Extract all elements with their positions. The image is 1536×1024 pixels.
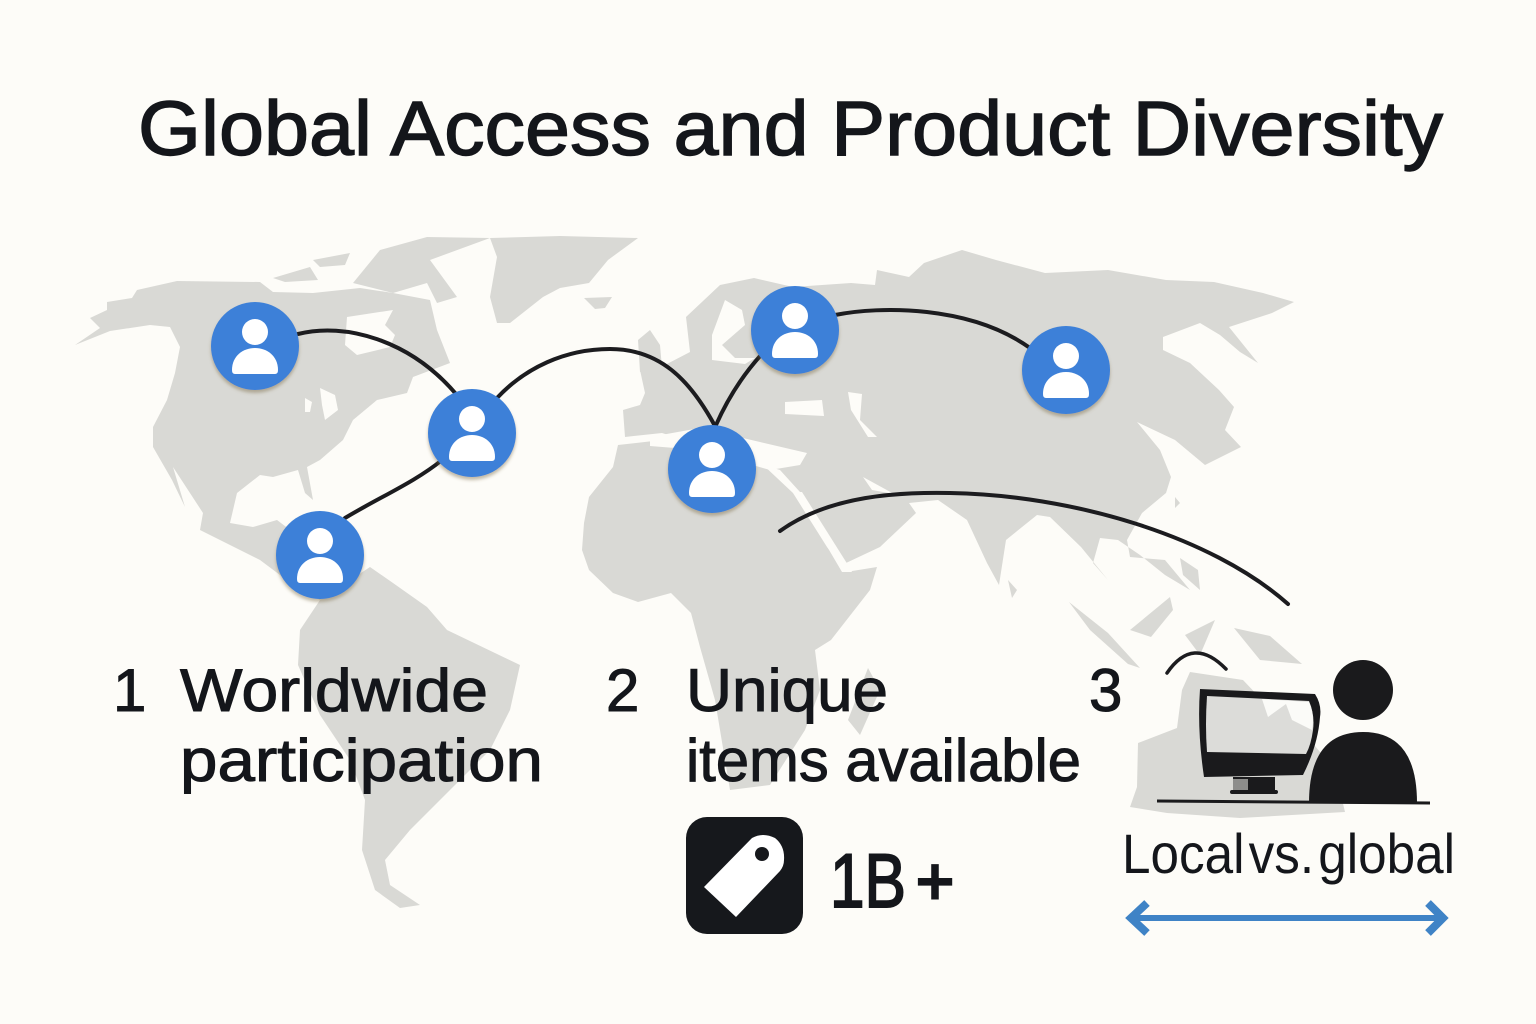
- Baltic: [712, 300, 755, 364]
- Australia: [1130, 672, 1345, 818]
- Madagascar: [848, 668, 880, 735]
- Sri Lanka, Taiwan, Philippines: [1008, 497, 1200, 598]
- stat: 1B+: +: [915, 842, 955, 920]
- user icon 4: [668, 425, 756, 513]
- item 2: unique items available: Unique: [686, 657, 888, 724]
- Europe and Asia: [623, 250, 1294, 590]
- item 3: number: 3: [1089, 657, 1122, 724]
- stat: 1B+: 1B: [830, 839, 906, 924]
- item 1: worldwide participation: Worldwide: [180, 657, 488, 724]
- UK and Ireland: [638, 330, 662, 372]
- Greenland: [490, 236, 638, 323]
- Africa: [582, 440, 877, 790]
- user icon 3: [276, 511, 364, 599]
- item 1: worldwide participation: 1: [113, 657, 146, 724]
- item 2: unique items available: items available: [686, 727, 1081, 794]
- connection lines: [298, 310, 1288, 604]
- icon: price tag: [686, 817, 803, 934]
- Great Lakes: [305, 388, 338, 420]
- user icon 6: [1022, 326, 1110, 414]
- Red Sea: [795, 492, 852, 572]
- label: local vs. global: Local vs. global: [1122, 822, 1455, 885]
- item 1: worldwide participation: participation: [180, 727, 543, 794]
- Arctic islands: [273, 237, 490, 303]
- seas: [305, 300, 894, 572]
- North America: [75, 281, 450, 600]
- Caspian Sea: [848, 392, 877, 437]
- item 1: worldwide participation: [113, 657, 543, 794]
- Persian Gulf: [863, 477, 894, 494]
- item 2: unique items available: [606, 657, 1081, 794]
- world map: [75, 236, 1345, 908]
- Black Sea: [785, 400, 824, 416]
- Iceland: [584, 297, 612, 309]
- Indonesia: [1069, 602, 1140, 668]
- icon: person at computer: [1157, 653, 1430, 803]
- item 2: unique items available: 2: [606, 657, 639, 724]
- user icon 5: [751, 286, 839, 374]
- user icon 1: [211, 302, 299, 390]
- South America: [298, 567, 520, 908]
- arrow: double headed: [1130, 903, 1445, 933]
- user icon 2: [428, 389, 516, 477]
- title: Global Access and Product Diversity: [138, 86, 1444, 172]
- Mediterranean: [650, 428, 807, 470]
- Hudson Bay: [345, 310, 395, 355]
